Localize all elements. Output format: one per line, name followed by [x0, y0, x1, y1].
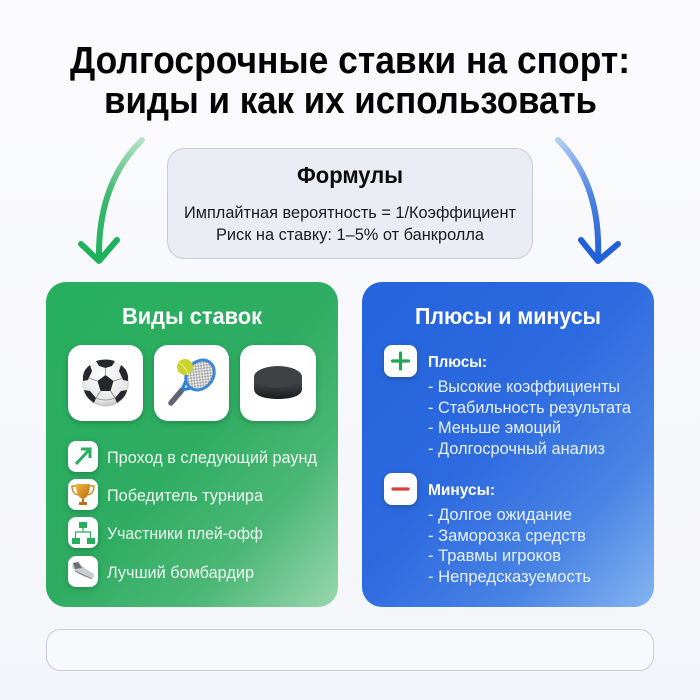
pros list: - Долгосрочный анализ	[428, 439, 605, 458]
list: bet types	[68, 441, 317, 587]
cons list: - Травмы игроков	[428, 546, 561, 565]
label: playoff participants: Участники плей-офф	[107, 524, 263, 543]
title: виды и как их использовать	[104, 80, 597, 122]
icon: tennis racket	[154, 345, 229, 421]
panel: pros and cons	[362, 282, 654, 607]
label: tournament winner: Победитель турнира	[107, 486, 264, 505]
pros heading: Плюсы:	[428, 354, 487, 371]
icon: trophy	[68, 479, 98, 510]
icon: minus	[384, 473, 417, 505]
pros list: - Стабильность результата	[428, 398, 632, 417]
label: next round: Проход в следующий раунд	[107, 448, 317, 467]
formula text: Имплайтная вероятность = 1/Коэффициент	[184, 203, 516, 222]
title	[70, 40, 630, 122]
icon: bracket	[68, 517, 98, 548]
cons heading: Минусы:	[428, 482, 495, 499]
arrow: green to left panel	[81, 140, 142, 261]
cons list: - Заморозка средств	[428, 526, 586, 545]
formulas heading: Формулы	[297, 162, 403, 188]
panel heading: pros and cons: Плюсы и минусы	[415, 303, 601, 329]
icon: hockey puck	[240, 345, 316, 421]
pros list: - Высокие коэффициенты	[428, 377, 620, 396]
icon: arrow up right	[68, 441, 98, 472]
cons list: - Непредсказуемость	[428, 567, 591, 586]
icon: plus	[384, 345, 417, 377]
cons list	[428, 505, 591, 586]
pros list: - Меньше эмоций	[428, 418, 561, 437]
arrow: blue to right panel	[558, 140, 618, 261]
panel heading: types of bets: Виды ставок	[122, 303, 262, 329]
title: Долгосрочные ставки на спорт:	[70, 40, 630, 82]
empty footer box	[46, 630, 654, 670]
panel: formulas	[168, 148, 532, 258]
formula text	[184, 203, 516, 244]
icon: football boot	[68, 556, 98, 587]
cons block	[384, 473, 591, 586]
formula text: Риск на ставку: 1–5% от банкролла	[216, 225, 485, 244]
pros block	[384, 345, 632, 458]
cons list: - Долгое ожидание	[428, 505, 572, 524]
panel: types of bets	[46, 282, 338, 607]
label: top scorer: Лучший бомбардир	[107, 563, 254, 582]
icon: soccer ball	[68, 345, 143, 421]
pros list	[428, 377, 632, 458]
